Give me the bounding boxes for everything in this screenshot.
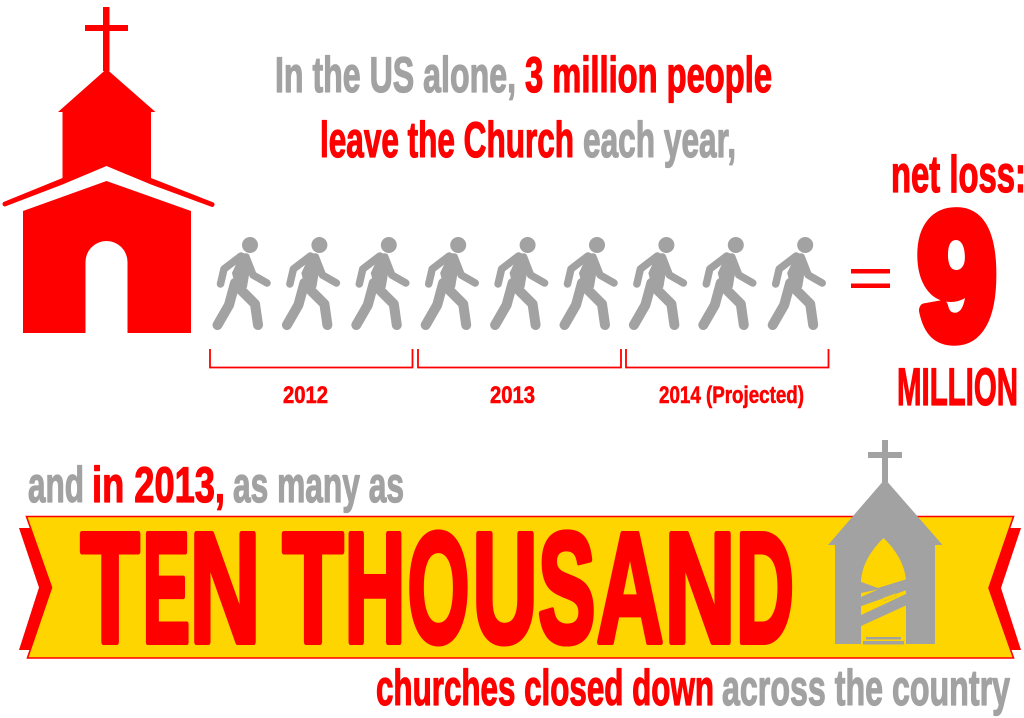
text: churches closed down across the country: churches closed down [376,660,714,716]
heading: 3 million people leave the Church each year [275,47,772,168]
brackets: years [210,349,828,368]
banner headline: TEN THOUSAND: H [344,501,406,676]
text: and in 2013, as many as: in 2013, [92,457,225,513]
text: and in 2013, as many as [28,457,404,513]
banner headline: TEN THOUSAND: S [538,501,596,676]
banner headline: TEN THOUSAND: O [408,501,470,676]
banner headline: TEN THOUSAND: D [736,501,794,676]
label: 2014 projected: 2014 (Projected) [659,382,804,409]
banner headline: TEN THOUSAND: U [472,501,538,676]
label: 2012: 2012 [283,382,328,409]
label: 2013: 2013 [490,382,535,409]
text: and in 2013, as many as: as many as [233,457,404,513]
callout: net loss 9 million: 9 [918,179,996,375]
heading: 3 million people leave the Church each year: In the US alone, [275,47,516,103]
equals sign [851,269,890,288]
text: and in 2013, as many as: and [28,457,84,513]
banner headline: TEN THOUSAND: N [664,501,736,676]
heading: 3 million people leave the Church each year: leave the Church [320,112,574,168]
icon: closed gray church [828,440,942,644]
banner headline: TEN THOUSAND: A [596,501,664,676]
banner headline: TEN THOUSAND: T [282,501,344,676]
banner headline: TEN THOUSAND: N [190,501,260,676]
pictogram: nine walking people [218,237,822,325]
banner: ribbon [19,516,1021,658]
heading: 3 million people leave the Church each year: 3 million people [525,47,772,103]
heading: 3 million people leave the Church each year: each year, [583,112,736,168]
icon: red church [3,7,215,333]
callout: net loss 9 million [891,146,1024,417]
banner headline: TEN THOUSAND: T [81,501,140,676]
banner headline: TEN THOUSAND: E [142,501,190,676]
